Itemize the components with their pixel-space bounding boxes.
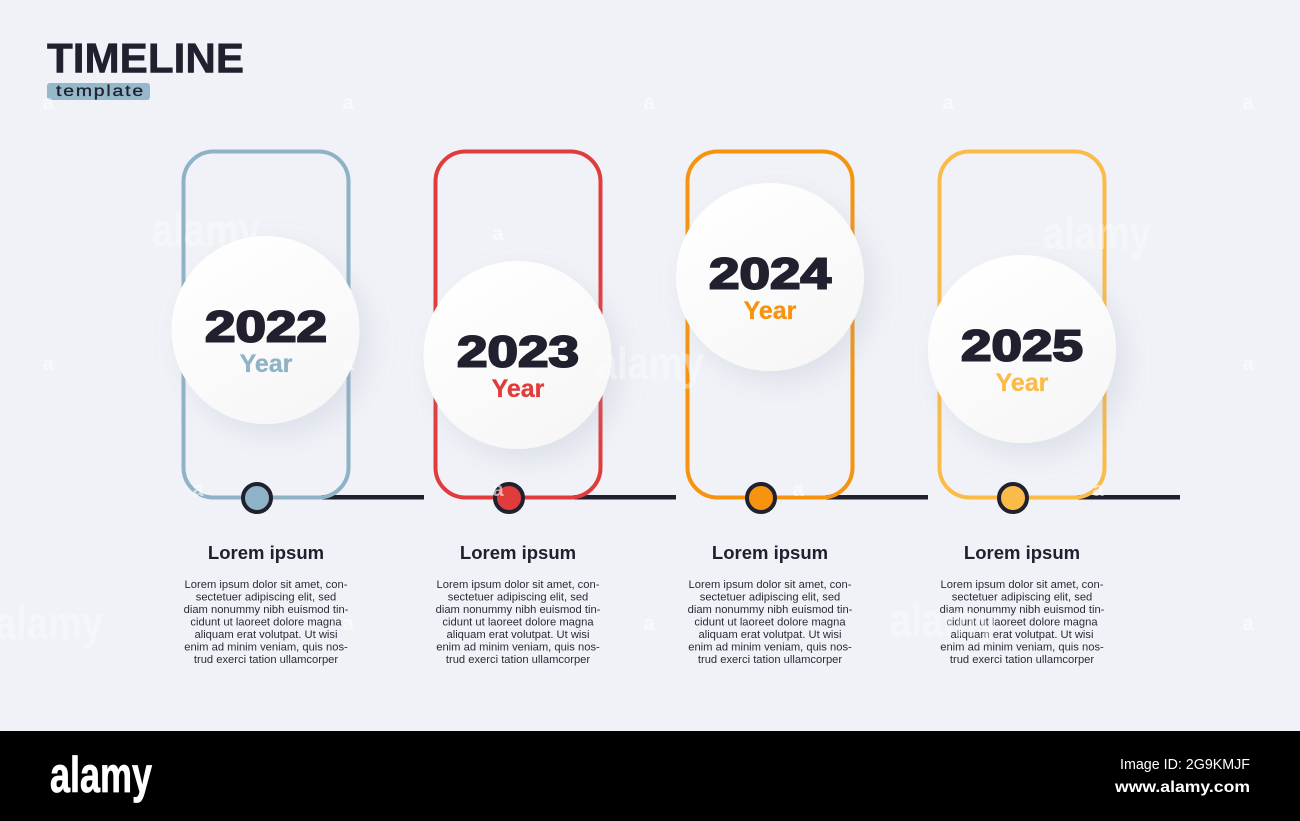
text block 2022: trud exerci tation ullamcorper (194, 654, 338, 666)
text block 2023: aliquam erat volutpat. Ut wisi (446, 629, 590, 641)
connector line 2024 (826, 495, 928, 500)
text block 2025: aliquam erat volutpat. Ut wisi (950, 629, 1094, 641)
milestone dot 2024 (747, 484, 775, 512)
watermarks: a (792, 479, 804, 501)
text block 2025: sectetuer adipiscing elit, sed (952, 592, 1092, 604)
panel: 2023 (424, 152, 676, 666)
watermarks: a (42, 353, 54, 375)
watermarks (0, 92, 1254, 649)
text block 2022: diam nonummy nibh euismod tin- (184, 604, 349, 616)
outline card 2022 (184, 152, 348, 498)
text block 2023: trud exerci tation ullamcorper (446, 654, 590, 666)
year circle 2022: Year (240, 350, 293, 378)
year circle 2023: Year (492, 375, 545, 403)
panel: 2025 (928, 152, 1180, 666)
text block 2024: Lorem ipsum (712, 542, 828, 563)
text block 2023: diam nonummy nibh euismod tin- (436, 604, 601, 616)
watermarks: a (42, 92, 54, 114)
year circle 2023: 2023 (457, 328, 579, 376)
watermarks: a (1242, 353, 1254, 375)
text block 2022: sectetuer adipiscing elit, sed (196, 592, 336, 604)
text block 2024: sectetuer adipiscing elit, sed (700, 592, 840, 604)
text block 2022: Lorem ipsum (208, 542, 324, 563)
watermarks: alamy (152, 204, 260, 256)
text block 2024: cidunt ut laoreet dolore magna (694, 616, 846, 628)
year circle 2025 (928, 255, 1116, 443)
text block 2025: trud exerci tation ullamcorper (950, 654, 1094, 666)
text block 2025: Lorem ipsum dolor sit amet, con- (941, 579, 1104, 591)
text block 2025: Lorem ipsum (964, 542, 1080, 563)
watermarks: a (492, 223, 504, 245)
text block 2022: enim ad minim veniam, quis nos- (184, 642, 348, 654)
text block 2024: trud exerci tation ullamcorper (698, 654, 842, 666)
text block 2024 (688, 542, 853, 666)
panel: 2024 (676, 152, 928, 666)
year circle 2024: Year (744, 297, 797, 325)
year circle 2024 (676, 183, 864, 371)
watermarks: alamy (1043, 207, 1151, 259)
watermarks: a (643, 613, 655, 635)
year circle 2022: 2022 (205, 302, 327, 352)
watermarks: alamy (596, 337, 704, 389)
text block 2022: Lorem ipsum dolor sit amet, con- (185, 579, 348, 591)
outline card 2024 (688, 152, 852, 498)
watermarks: a (192, 479, 204, 501)
text block 2025: enim ad minim veniam, quis nos- (940, 642, 1104, 654)
text block 2022: aliquam erat volutpat. Ut wisi (194, 629, 338, 641)
connector line 2022 (322, 495, 424, 500)
outline card 2023 (436, 152, 600, 498)
milestone dot 2025 (999, 484, 1027, 512)
watermarks: a (1242, 613, 1254, 635)
website: www.alamy.com (1114, 779, 1250, 796)
text block 2023: enim ad minim veniam, quis nos- (436, 642, 600, 654)
year circle 2024: 2024 (709, 250, 832, 298)
text block 2023: Lorem ipsum dolor sit amet, con- (437, 579, 600, 591)
text block 2022: cidunt ut laoreet dolore magna (190, 616, 342, 628)
text block 2023 (436, 542, 601, 666)
watermarks: a (1092, 479, 1104, 501)
year circle 2022 (172, 236, 360, 424)
connector line 2023 (574, 495, 676, 500)
watermarks: a (342, 353, 354, 375)
year circle 2023 (424, 261, 612, 449)
watermarks: a (492, 479, 504, 501)
text block 2022 (184, 542, 349, 666)
text block 2023: cidunt ut laoreet dolore magna (442, 616, 594, 628)
footer bar (0, 731, 1300, 821)
title: TIMELINE (47, 34, 244, 82)
year circle 2025: 2025 (961, 322, 1083, 370)
text block 2025: diam nonummy nibh euismod tin- (940, 604, 1105, 616)
text block 2024: enim ad minim veniam, quis nos- (688, 642, 852, 654)
footer logo: alamy (50, 747, 152, 803)
text block 2024: aliquam erat volutpat. Ut wisi (698, 629, 842, 641)
watermarks: a (643, 92, 655, 114)
text block 2023: Lorem ipsum (460, 542, 576, 563)
year circle 2025: Year (996, 369, 1049, 397)
watermarks: a (942, 92, 954, 114)
watermarks: a (342, 92, 354, 114)
subtitle tag: template: template (56, 83, 145, 100)
panel: 2022 (172, 152, 424, 666)
milestone dot 2023 (495, 484, 523, 512)
text block 2024: Lorem ipsum dolor sit amet, con- (689, 579, 852, 591)
text block 2023: sectetuer adipiscing elit, sed (448, 592, 588, 604)
milestone dot 2022 (243, 484, 271, 512)
text block 2025 (940, 542, 1105, 666)
watermarks: a (1242, 92, 1254, 114)
outline card 2025 (940, 152, 1104, 498)
image id: Image ID: 2G9KMJF (1120, 756, 1250, 773)
connector line 2025 (1078, 495, 1180, 500)
text block 2024: diam nonummy nibh euismod tin- (688, 604, 853, 616)
watermarks: alamy (890, 594, 998, 646)
watermarks: a (342, 613, 354, 635)
text block 2025: cidunt ut laoreet dolore magna (946, 616, 1098, 628)
